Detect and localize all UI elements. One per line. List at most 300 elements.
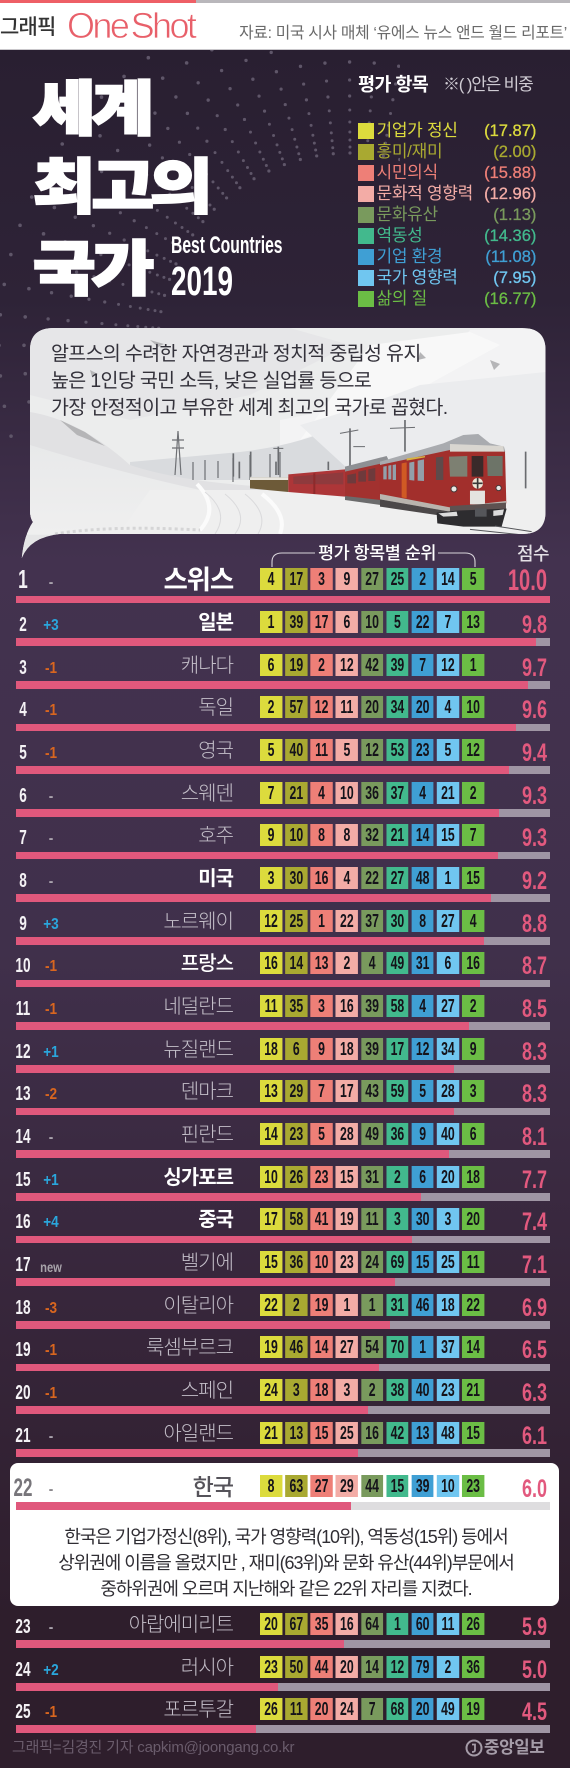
legend: power: 국가 영향력 bbox=[376, 268, 458, 287]
score bar bbox=[16, 852, 550, 859]
score: 6.1 bbox=[521, 1422, 546, 1450]
category ranks: 41 bbox=[315, 1209, 329, 1229]
category ranks: 57 bbox=[290, 697, 304, 717]
score bar bbox=[16, 766, 550, 774]
category ranks: 54 bbox=[366, 1337, 379, 1357]
score: 8.1 bbox=[521, 1123, 546, 1151]
country: 중국 bbox=[198, 1209, 233, 1231]
category ranks: 11 bbox=[366, 1209, 379, 1229]
legend: movers: (14.36) bbox=[484, 227, 536, 245]
score: 7.7 bbox=[521, 1166, 546, 1194]
category ranks: 10 bbox=[340, 783, 354, 803]
category ranks: 1 bbox=[268, 612, 275, 632]
rank: 23 bbox=[15, 1616, 31, 1638]
score: 9.3 bbox=[521, 782, 546, 810]
category ranks: 25 bbox=[441, 1252, 455, 1272]
category ranks: 14 bbox=[265, 1124, 278, 1144]
category ranks: 40 bbox=[416, 1380, 430, 1400]
category ranks: 4 bbox=[420, 783, 426, 803]
legend: heritage bbox=[358, 205, 536, 224]
category ranks: 1 bbox=[344, 1295, 351, 1315]
legend: movers bbox=[358, 226, 536, 245]
category ranks bbox=[260, 1166, 498, 1188]
change: - bbox=[49, 1481, 53, 1498]
country: 아일랜드 bbox=[163, 1423, 233, 1445]
category ranks bbox=[260, 1613, 498, 1635]
category ranks: 12 bbox=[340, 655, 354, 675]
category ranks: 20 bbox=[467, 1209, 480, 1229]
JoongAng Ilbo logo bbox=[464, 1737, 550, 1759]
category ranks: 18 bbox=[265, 1039, 278, 1059]
category ranks: 2 bbox=[344, 953, 351, 973]
category ranks: 9 bbox=[420, 1124, 426, 1144]
category ranks: 21 bbox=[290, 783, 304, 803]
rank: 8 bbox=[19, 870, 27, 892]
legend: citizenship: (15.88) bbox=[484, 164, 536, 182]
category ranks: 26 bbox=[467, 1614, 480, 1634]
row 13: Denmark bbox=[0, 1080, 570, 1116]
heading bracket bbox=[271, 552, 476, 567]
category ranks: 58 bbox=[290, 1209, 304, 1229]
change: -1 bbox=[45, 1704, 57, 1721]
category ranks: 58 bbox=[391, 996, 405, 1016]
category ranks: 22 bbox=[340, 911, 354, 931]
country: 아랍에미리트 bbox=[129, 1614, 233, 1636]
category ranks: 22 bbox=[265, 1295, 278, 1315]
category ranks: 19 bbox=[315, 1295, 329, 1315]
category ranks: 23 bbox=[340, 1252, 354, 1272]
category ranks: 21 bbox=[467, 1380, 480, 1400]
background dot fan bbox=[0, 50, 400, 438]
category ranks: 6 bbox=[344, 612, 351, 632]
category ranks: 46 bbox=[416, 1295, 430, 1315]
category ranks: 9 bbox=[319, 1039, 325, 1059]
category ranks: 34 bbox=[391, 697, 405, 717]
panel: South Korea highlight bbox=[10, 1463, 559, 1606]
score: 5.9 bbox=[521, 1613, 546, 1641]
category ranks: 1 bbox=[394, 1614, 401, 1634]
row 8: USA bbox=[16, 867, 550, 902]
rank: 15 bbox=[15, 1169, 31, 1191]
category ranks bbox=[260, 1251, 498, 1273]
category ranks: 22 bbox=[416, 612, 430, 632]
legend: business: (11.08) bbox=[485, 248, 536, 266]
change: - bbox=[49, 1428, 53, 1445]
change: +4 bbox=[43, 1214, 59, 1231]
category ranks: 8 bbox=[420, 911, 426, 931]
series name: One Shot bbox=[67, 5, 194, 46]
callout text: 가장 안정적이고 부유한 세계 최고의 국가로 꼽혔다. bbox=[51, 397, 447, 419]
score bar bbox=[16, 724, 550, 731]
category ranks: 27 bbox=[441, 911, 455, 931]
rank: 1 bbox=[18, 566, 28, 594]
category ranks: 30 bbox=[416, 1209, 430, 1229]
change: new bbox=[40, 1259, 62, 1275]
category ranks: 39 bbox=[290, 612, 304, 632]
category ranks: 79 bbox=[416, 1656, 430, 1676]
rank: 19 bbox=[15, 1339, 31, 1361]
category ranks: 12 bbox=[315, 697, 329, 717]
category ranks: 23 bbox=[467, 1476, 480, 1496]
category ranks: 5 bbox=[394, 612, 401, 632]
country: 스위스 bbox=[163, 565, 233, 595]
heading text: 평가 항목별 순위 bbox=[318, 543, 436, 563]
row 19: Luxembourg bbox=[0, 1336, 570, 1372]
category ranks bbox=[260, 824, 484, 846]
change: -1 bbox=[45, 1001, 57, 1018]
category ranks: 36 bbox=[391, 1124, 405, 1144]
legend: quality of life bbox=[358, 289, 536, 308]
legend bbox=[358, 74, 536, 308]
country: 한국 bbox=[193, 1474, 233, 1500]
category ranks: 4 bbox=[470, 911, 477, 931]
change: +1 bbox=[43, 1044, 59, 1061]
category ranks: 31 bbox=[391, 1295, 405, 1315]
category ranks: 22 bbox=[467, 1295, 480, 1315]
category ranks: 16 bbox=[467, 953, 480, 973]
legend: adventure: (2.00) bbox=[493, 143, 536, 161]
category ranks: 10 bbox=[467, 697, 480, 717]
category ranks bbox=[260, 1475, 498, 1497]
category ranks: 39 bbox=[366, 1039, 379, 1059]
country: 이탈리아 bbox=[163, 1295, 233, 1317]
change: -2 bbox=[45, 1086, 57, 1103]
category ranks: 4 bbox=[344, 868, 351, 888]
series label: 그래픽 bbox=[0, 16, 56, 39]
category ranks: 2 bbox=[420, 569, 426, 589]
category ranks: 20 bbox=[315, 1699, 329, 1719]
legend: movers: 역동성 bbox=[376, 226, 423, 245]
title: 최고의 bbox=[33, 154, 209, 221]
category ranks: 7 bbox=[369, 1699, 376, 1719]
category ranks: 3 bbox=[268, 868, 275, 888]
category ranks: 5 bbox=[344, 740, 351, 760]
country: 덴마크 bbox=[181, 1081, 233, 1103]
score bar bbox=[16, 980, 550, 987]
category ranks: 26 bbox=[265, 1699, 278, 1719]
score bar bbox=[16, 681, 550, 689]
category ranks: 15 bbox=[391, 1476, 405, 1496]
category ranks: 46 bbox=[290, 1337, 304, 1357]
category ranks: 4 bbox=[319, 783, 325, 803]
score: 9.2 bbox=[521, 867, 546, 895]
category ranks: 50 bbox=[290, 1656, 304, 1676]
category ranks bbox=[260, 1208, 498, 1230]
category ranks: 13 bbox=[290, 1423, 304, 1443]
rank: 21 bbox=[15, 1425, 31, 1447]
legend: entrepreneurship: 기업가 정신 bbox=[376, 121, 458, 140]
category ranks: 13 bbox=[416, 1423, 430, 1443]
legend: entrepreneurship: (17.87) bbox=[484, 122, 536, 140]
category ranks: 25 bbox=[290, 911, 304, 931]
category ranks: 8 bbox=[319, 825, 325, 845]
score: 6.0 bbox=[521, 1475, 546, 1503]
category ranks bbox=[260, 1422, 498, 1444]
score bar bbox=[16, 894, 550, 902]
legend: entrepreneurship bbox=[358, 121, 536, 140]
category ranks: 3 bbox=[319, 996, 325, 1016]
category ranks: 20 bbox=[366, 697, 379, 717]
score: 8.3 bbox=[521, 1038, 546, 1066]
category ranks: 5 bbox=[319, 1124, 325, 1144]
row 25: Portugal bbox=[0, 1698, 570, 1734]
category ranks bbox=[260, 1080, 498, 1102]
category ranks: 21 bbox=[391, 825, 405, 845]
source: 자료: 미국 시사 매체 ‘유에스 뉴스 앤드 월드 리포트’ bbox=[239, 24, 567, 42]
change: +2 bbox=[43, 1662, 59, 1678]
category ranks: 48 bbox=[416, 868, 430, 888]
category ranks: 68 bbox=[391, 1699, 405, 1719]
legend: power bbox=[358, 268, 536, 287]
rank: 6 bbox=[19, 785, 27, 807]
row 6: Sweden bbox=[16, 782, 550, 817]
category ranks: 39 bbox=[366, 996, 379, 1016]
category ranks: 59 bbox=[391, 1081, 405, 1101]
category ranks: 21 bbox=[265, 1423, 278, 1443]
score: 9.4 bbox=[521, 739, 546, 767]
subtitle: Best Countries bbox=[171, 232, 283, 259]
change: -3 bbox=[45, 1300, 57, 1317]
category ranks: 18 bbox=[467, 1167, 480, 1187]
category ranks bbox=[260, 1379, 498, 1401]
category ranks: 44 bbox=[366, 1476, 379, 1496]
category ranks: 19 bbox=[467, 1699, 480, 1719]
category ranks bbox=[260, 568, 484, 590]
score bar bbox=[16, 1449, 550, 1457]
category ranks: 17 bbox=[391, 1039, 405, 1059]
change: -1 bbox=[45, 1342, 57, 1359]
category ranks: 20 bbox=[416, 697, 430, 717]
category ranks bbox=[260, 867, 484, 889]
country: 독일 bbox=[198, 697, 233, 719]
category ranks: 17 bbox=[290, 569, 304, 589]
row 1: Switzerland bbox=[16, 564, 550, 603]
row 24: Russia bbox=[0, 1656, 570, 1692]
rank: 7 bbox=[19, 827, 27, 849]
category ranks: 34 bbox=[441, 1039, 455, 1059]
category ranks bbox=[260, 1336, 498, 1358]
category ranks: 9 bbox=[470, 1039, 477, 1059]
category ranks: 5 bbox=[470, 569, 477, 589]
score bar bbox=[16, 638, 550, 646]
score: 7.1 bbox=[521, 1251, 546, 1279]
title bbox=[32, 76, 209, 303]
category ranks: 36 bbox=[366, 783, 379, 803]
title: 국가 bbox=[33, 236, 150, 303]
logo text: 중앙일보 bbox=[484, 1738, 545, 1757]
score bar bbox=[16, 1406, 550, 1414]
category ranks bbox=[260, 739, 484, 761]
logo mark bbox=[464, 1738, 484, 1758]
category ranks: 5 bbox=[445, 740, 452, 760]
category ranks: 14 bbox=[366, 1656, 379, 1676]
category ranks: 27 bbox=[391, 868, 405, 888]
category ranks: 40 bbox=[290, 740, 304, 760]
rank: 2 bbox=[19, 614, 27, 636]
rank: 3 bbox=[19, 657, 27, 679]
legend: quality of life: 삶의 질 bbox=[376, 289, 427, 308]
score bar bbox=[16, 1278, 550, 1286]
category ranks: 8 bbox=[268, 1476, 275, 1496]
Korea summary text: 상위권에 이름을 올렸지만 , 재미(63위)와 문화 유산(44위)부문에서 bbox=[58, 1552, 514, 1572]
score: 9.3 bbox=[521, 824, 546, 852]
category ranks bbox=[260, 952, 484, 974]
category ranks: 16 bbox=[366, 1423, 379, 1443]
category ranks: 15 bbox=[467, 1423, 480, 1443]
category ranks: 14 bbox=[315, 1337, 329, 1357]
category ranks: 4 bbox=[420, 996, 426, 1016]
row 23: UAE bbox=[0, 1613, 570, 1649]
category ranks bbox=[260, 995, 484, 1017]
category ranks: 24 bbox=[340, 1699, 354, 1719]
category ranks: 2 bbox=[470, 996, 477, 1016]
category ranks: 15 bbox=[441, 825, 455, 845]
category ranks: 11 bbox=[316, 740, 328, 760]
country: 일본 bbox=[198, 612, 233, 634]
score bar bbox=[16, 937, 550, 945]
country: 호주 bbox=[198, 825, 233, 847]
column heading: score: 점수 bbox=[517, 544, 549, 564]
category ranks: 23 bbox=[265, 1656, 278, 1676]
legend: adventure bbox=[358, 142, 536, 161]
rank: 11 bbox=[16, 998, 30, 1020]
rank: 17 bbox=[15, 1254, 31, 1276]
category ranks: 7 bbox=[420, 655, 426, 675]
category ranks: 3 bbox=[293, 1380, 300, 1400]
legend: adventure: 흥미/재미 bbox=[376, 142, 442, 161]
category ranks: 30 bbox=[290, 868, 304, 888]
change: -1 bbox=[45, 745, 57, 762]
category ranks: 13 bbox=[265, 1081, 278, 1101]
category ranks: 31 bbox=[416, 953, 430, 973]
category ranks: 29 bbox=[290, 1081, 304, 1101]
category ranks: 18 bbox=[340, 1039, 354, 1059]
category ranks: 18 bbox=[315, 1380, 329, 1400]
category ranks: 1 bbox=[420, 1337, 426, 1357]
category ranks: 24 bbox=[265, 1380, 278, 1400]
category ranks: 13 bbox=[467, 612, 480, 632]
category ranks: 43 bbox=[366, 1081, 379, 1101]
score: 9.6 bbox=[521, 696, 546, 724]
country: 벨기에 bbox=[181, 1252, 233, 1274]
category ranks: 4 bbox=[445, 697, 452, 717]
row 14: Finland bbox=[0, 1123, 570, 1159]
category ranks: 48 bbox=[441, 1423, 455, 1443]
country: 싱가포르 bbox=[163, 1167, 233, 1189]
score: 8.3 bbox=[521, 1080, 546, 1108]
row 5: UK bbox=[16, 739, 550, 774]
change: - bbox=[49, 574, 53, 591]
category ranks: 37 bbox=[441, 1337, 455, 1357]
rank: 4 bbox=[19, 699, 27, 721]
score bar bbox=[16, 1502, 550, 1510]
category ranks bbox=[260, 611, 484, 633]
category ranks: 2 bbox=[470, 783, 477, 803]
category ranks: 22 bbox=[366, 868, 379, 888]
callout text bbox=[51, 343, 447, 419]
category ranks: 16 bbox=[315, 868, 329, 888]
callout text: 높은 1인당 국민 소득, 낮은 실업률 등으로 bbox=[51, 370, 371, 392]
category ranks: 7 bbox=[445, 612, 452, 632]
country: 노르웨이 bbox=[163, 911, 233, 933]
category ranks: 1 bbox=[369, 1295, 376, 1315]
country: 네덜란드 bbox=[163, 996, 233, 1018]
category ranks: 2 bbox=[394, 1167, 401, 1187]
category ranks: 23 bbox=[315, 1167, 329, 1187]
category ranks: 10 bbox=[315, 1252, 329, 1272]
category ranks: 17 bbox=[265, 1209, 278, 1229]
score bar bbox=[16, 596, 550, 603]
category ranks: 6 bbox=[293, 1039, 300, 1059]
category ranks: 49 bbox=[366, 1124, 379, 1144]
change: - bbox=[49, 1619, 53, 1636]
subtitle: 2019 bbox=[171, 258, 233, 304]
category ranks: 11 bbox=[290, 1699, 303, 1719]
score bar bbox=[16, 1725, 550, 1733]
category ranks: 35 bbox=[315, 1614, 329, 1634]
category ranks: 6 bbox=[445, 953, 452, 973]
country: 영국 bbox=[198, 740, 233, 762]
category ranks: 12 bbox=[391, 1656, 405, 1676]
category ranks: 11 bbox=[265, 996, 278, 1016]
category ranks: 25 bbox=[391, 569, 405, 589]
score: 8.8 bbox=[521, 910, 546, 938]
category ranks: 10 bbox=[441, 1476, 455, 1496]
row 3: Canada bbox=[16, 654, 550, 689]
score bar bbox=[16, 1022, 550, 1030]
category ranks bbox=[260, 782, 484, 804]
category ranks: 60 bbox=[416, 1614, 430, 1634]
country: 캐나다 bbox=[181, 655, 233, 677]
category ranks: 7 bbox=[268, 783, 275, 803]
category ranks: 42 bbox=[366, 655, 379, 675]
category ranks: 19 bbox=[265, 1337, 278, 1357]
column heading: rank by category bbox=[271, 543, 476, 567]
category ranks: 10 bbox=[265, 1167, 278, 1187]
category ranks: 3 bbox=[470, 1081, 477, 1101]
credit: 그래픽=김경진 기자 capkim@joongang.co.kr bbox=[12, 1739, 294, 1756]
category ranks: 40 bbox=[441, 1124, 455, 1144]
category ranks: 6 bbox=[420, 1167, 426, 1187]
category ranks: 23 bbox=[416, 740, 430, 760]
row 10: France bbox=[15, 952, 550, 987]
category ranks: 6 bbox=[268, 655, 275, 675]
category ranks: 8 bbox=[344, 825, 351, 845]
row 16: China bbox=[0, 1208, 570, 1244]
category ranks: 12 bbox=[467, 740, 480, 760]
category ranks: 29 bbox=[340, 1476, 354, 1496]
category ranks: 2 bbox=[268, 697, 275, 717]
country: 스페인 bbox=[181, 1380, 233, 1402]
category ranks bbox=[260, 1698, 498, 1720]
row 9: Norway bbox=[16, 910, 550, 945]
category ranks: 24 bbox=[366, 1252, 379, 1272]
category ranks: 20 bbox=[416, 1699, 430, 1719]
change: -1 bbox=[45, 660, 57, 677]
category ranks: 11 bbox=[442, 1614, 455, 1634]
category ranks: 7 bbox=[319, 1081, 325, 1101]
legend: citizenship: 시민의식 bbox=[376, 163, 438, 182]
legend note: ※( )안은 비중 bbox=[443, 75, 533, 94]
change: +3 bbox=[43, 916, 59, 933]
country: 뉴질랜드 bbox=[163, 1039, 233, 1061]
Korea summary text bbox=[10, 1524, 562, 1604]
change: -1 bbox=[45, 1385, 57, 1402]
category ranks: 14 bbox=[416, 825, 430, 845]
category ranks: 31 bbox=[366, 1167, 379, 1187]
country: 스웨덴 bbox=[181, 783, 233, 805]
category ranks: 16 bbox=[340, 996, 354, 1016]
